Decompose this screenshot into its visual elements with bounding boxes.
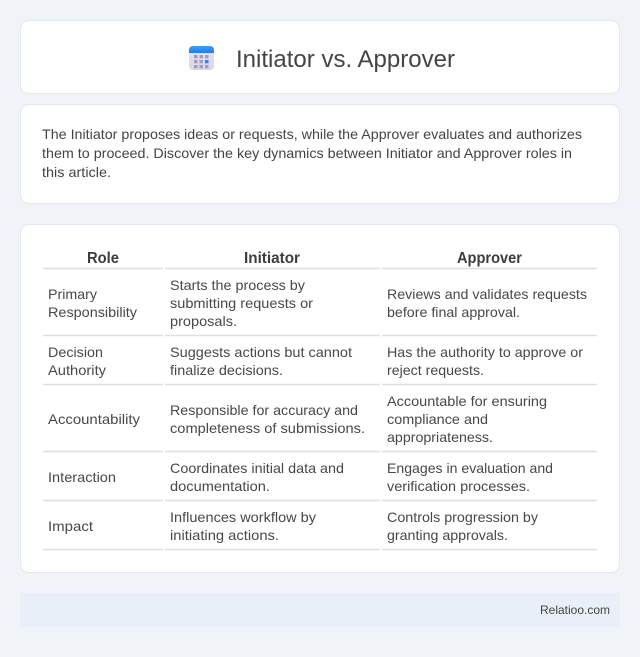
intro text: The Initiator proposes ideas or requests, while the Approver evaluates and authorizes — [42, 126, 582, 142]
row: primary responsibility: Starts the process by — [170, 277, 305, 293]
row: interaction: Engages in evaluation and — [387, 460, 553, 476]
row: primary responsibility: submitting requests or — [170, 295, 313, 311]
heading: Initiator vs. Approver — [236, 46, 455, 73]
row: interaction: documentation. — [170, 478, 270, 494]
row: decision authority: Authority — [48, 362, 106, 378]
table header — [87, 250, 522, 267]
row: primary responsibility: proposals. — [170, 313, 237, 329]
row: primary responsibility: before final approval. — [387, 304, 520, 320]
row: accountability: compliance and — [387, 411, 488, 427]
row: impact — [48, 509, 538, 543]
row: decision authority: Has the authority to approve or — [387, 344, 583, 360]
row: decision authority: reject requests. — [387, 362, 484, 378]
row: primary responsibility: Reviews and validates requests — [387, 286, 587, 302]
row: decision authority — [48, 344, 583, 378]
table header: Role — [87, 250, 119, 267]
row: interaction: verification processes. — [387, 478, 530, 494]
panel: comparison table — [20, 224, 620, 572]
row: accountability: Accountability — [48, 411, 140, 427]
row: impact: Influences workflow by — [170, 509, 316, 525]
row: primary responsibility: Responsibility — [48, 304, 137, 320]
row: primary responsibility: Primary — [48, 286, 97, 302]
row: interaction — [48, 460, 553, 494]
row: accountability — [48, 393, 547, 445]
footer — [20, 593, 620, 627]
table header: Approver — [457, 250, 522, 267]
row: accountability: Responsible for accuracy and — [170, 402, 358, 418]
icon: calendar — [189, 46, 214, 70]
panel: title — [20, 20, 620, 94]
row: decision authority: Suggests actions but cannot — [170, 344, 352, 360]
row: impact: initiating actions. — [170, 527, 279, 543]
row: impact: granting approvals. — [387, 527, 508, 543]
footer: Relatioo.com — [540, 603, 610, 617]
table row rules — [43, 268, 597, 550]
row: interaction: Coordinates initial data and — [170, 460, 344, 476]
intro text — [42, 126, 582, 180]
row: impact: Controls progression by — [387, 509, 538, 525]
intro text: them to proceed. Discover the key dynamics between Initiator and Approver roles in — [42, 145, 572, 161]
row: impact: Impact — [48, 518, 93, 534]
row: decision authority: Decision — [48, 344, 103, 360]
panel: introduction — [20, 104, 620, 204]
row: decision authority: finalize decisions. — [170, 362, 283, 378]
row: interaction: Interaction — [48, 469, 116, 485]
row: accountability: appropriateness. — [387, 429, 493, 445]
table header: Initiator — [244, 250, 300, 267]
row: primary responsibility — [48, 277, 587, 329]
intro text: this article. — [42, 164, 111, 180]
row: accountability: completeness of submissions. — [170, 420, 365, 436]
row: accountability: Accountable for ensuring — [387, 393, 547, 409]
